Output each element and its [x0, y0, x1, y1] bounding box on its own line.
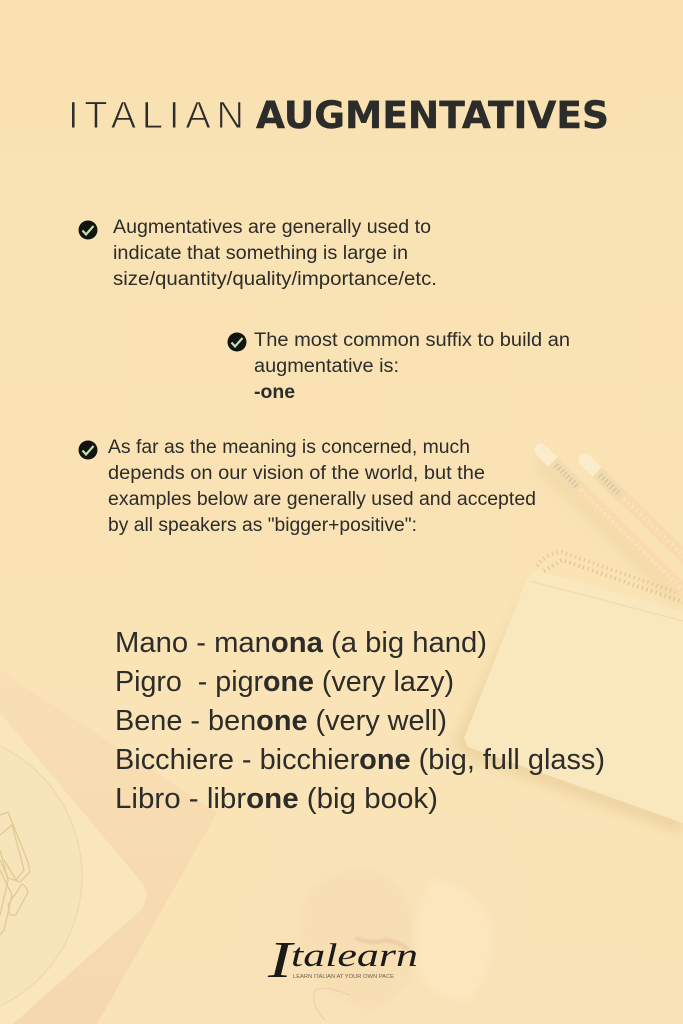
zip pouch: [452, 552, 683, 835]
marble tray: [0, 713, 147, 1024]
bullet three: [78, 437, 536, 536]
peony flower: [211, 811, 552, 1024]
bowl: [0, 732, 82, 1020]
title bold word: AUGMENTATIVES: [256, 94, 609, 137]
text block: by all speakers as "bigger+positive":: [108, 515, 417, 536]
text block: size/quantity/quality/importance/etc.: [113, 269, 437, 290]
examples list: Libro - librone (big book): [115, 783, 438, 815]
text block: Augmentatives are generally used to: [113, 217, 431, 238]
pencils: [538, 450, 683, 602]
examples list: Pigro - pigrone (very lazy): [115, 666, 454, 698]
text block: The most common suffix to build an: [254, 330, 570, 351]
pencil one: [541, 450, 683, 597]
examples list: [115, 627, 605, 815]
logo: [267, 932, 418, 989]
paper clips: [0, 812, 30, 935]
icon: check mark: [78, 440, 98, 460]
bullet one: [78, 217, 437, 290]
pink paper shape: [0, 670, 217, 1024]
examples list: Mano - manona (a big hand): [115, 627, 487, 659]
icon: check mark: [228, 332, 246, 352]
logo tagline: LEARN ITALIAN AT YOUR OWN PACE: [293, 974, 395, 980]
text block: [254, 330, 570, 403]
text block: As far as the meaning is concerned, much: [108, 437, 470, 458]
logo initial: I: [267, 932, 296, 989]
text block: indicate that something is large in: [113, 243, 408, 264]
text block: depends on our vision of the world, but the: [108, 463, 485, 484]
text block: -one: [254, 382, 295, 403]
text block: [108, 437, 536, 536]
pencil two: [585, 460, 683, 562]
text block: augmentative is:: [254, 356, 399, 377]
examples list: Bicchiere - bicchierone (big, full glass): [115, 744, 605, 776]
text block: [113, 217, 437, 290]
title light word: ITALIAN: [68, 95, 244, 137]
logo wordmark: talearn: [291, 938, 418, 974]
bullet two: [228, 330, 570, 403]
icon: check mark: [78, 220, 98, 240]
title: [68, 94, 609, 137]
text block: examples below are generally used and accepted: [108, 489, 536, 510]
zipper: [537, 552, 683, 595]
examples list: Bene - benone (very well): [115, 705, 447, 737]
